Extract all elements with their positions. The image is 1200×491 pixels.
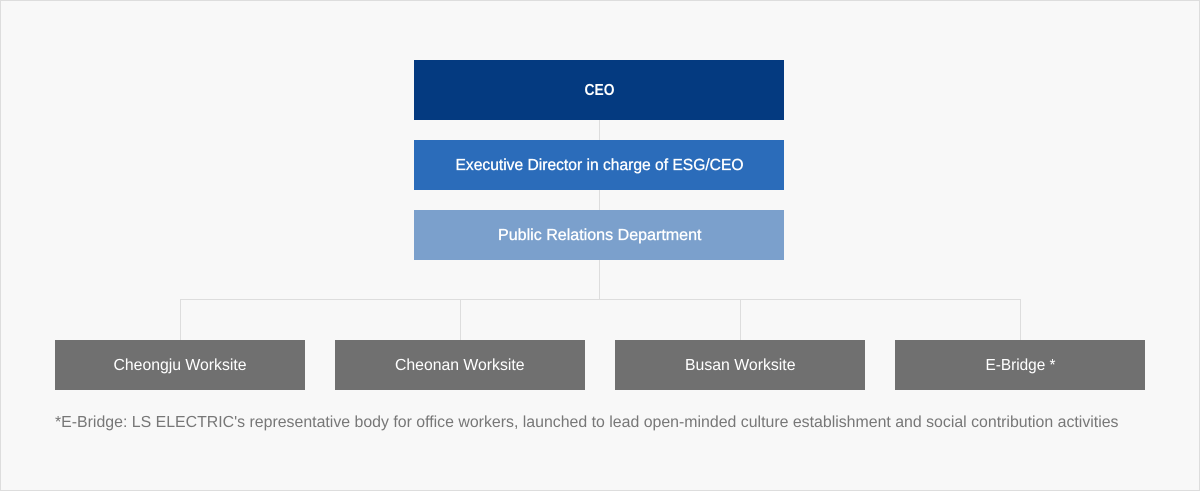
footnote: *E-Bridge: LS ELECTRIC's representative body for office workers, launched to lead open-minded culture establishment and social contribution activities — [55, 414, 1118, 431]
box: E-Bridge: E-Bridge * — [986, 357, 1056, 374]
box: Busan Worksite — [615, 340, 865, 390]
box: Executive Director in charge of ESG/CEO — [414, 140, 784, 190]
box: CEO — [414, 60, 784, 120]
box: Busan Worksite: Busan Worksite — [685, 357, 796, 374]
box: Public Relations Department — [414, 210, 784, 260]
box: CEO: CEO — [584, 82, 614, 99]
box: Public Relations Department: Public Relations Department — [498, 227, 702, 244]
connector lines — [180, 120, 1021, 340]
box: Cheongju Worksite: Cheongju Worksite — [114, 357, 247, 374]
box: E-Bridge — [895, 340, 1145, 390]
box: Executive Director in charge of ESG/CEO: Executive Director in charge of ESG/CEO — [456, 157, 744, 174]
box: Cheonan Worksite — [335, 340, 585, 390]
box: Cheongju Worksite — [55, 340, 305, 390]
box: Cheonan Worksite: Cheonan Worksite — [395, 357, 525, 374]
